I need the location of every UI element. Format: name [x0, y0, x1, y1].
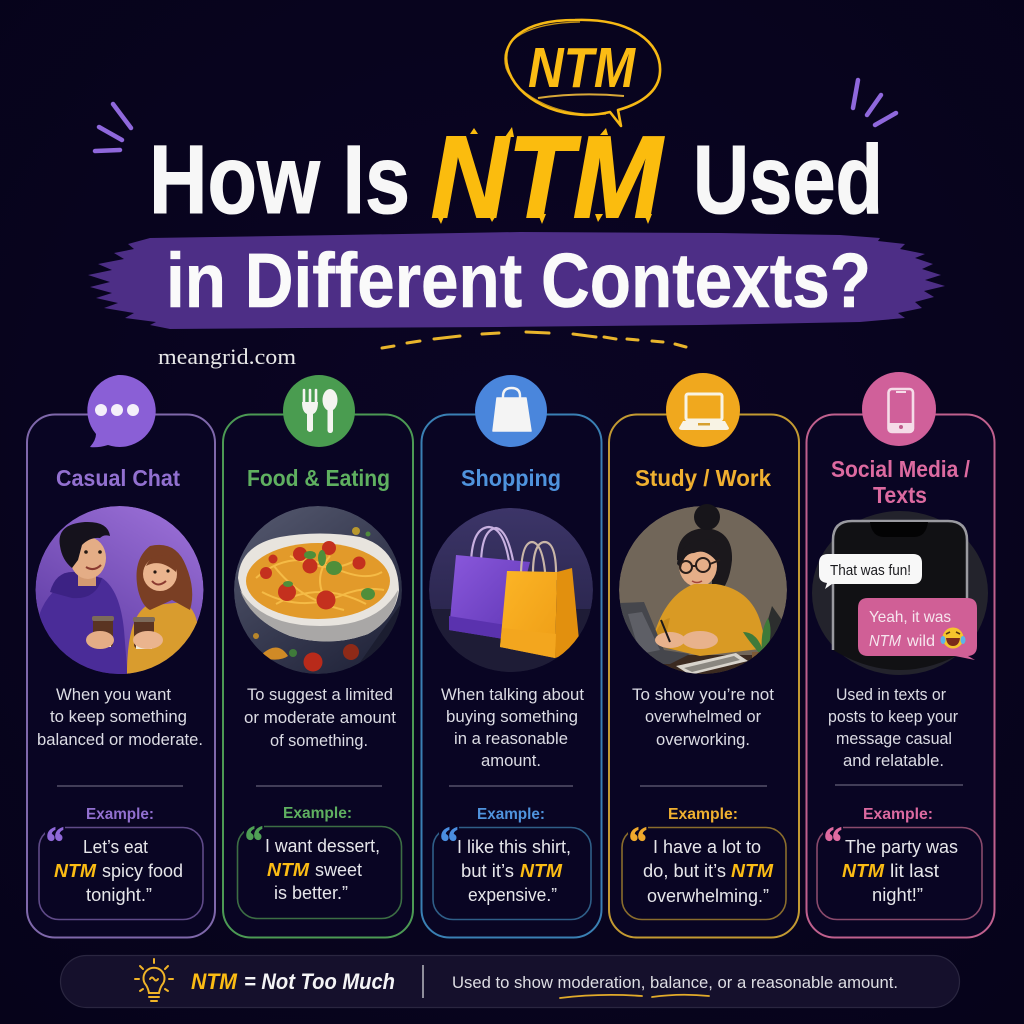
- description: To show you’re not: [632, 686, 774, 704]
- description: To suggest a limited: [247, 686, 393, 704]
- example quote box: “: [629, 820, 647, 866]
- definition: NTM: [191, 969, 238, 994]
- example label: Example:: [86, 806, 154, 823]
- icon: fork and spoon: [283, 375, 355, 447]
- heading: shopping: Shopping: [461, 465, 561, 491]
- description: buying something: [446, 708, 578, 726]
- example quote box: The party was: [845, 837, 958, 857]
- icon: light bulb: [135, 959, 173, 1001]
- illustration: student at laptop: [619, 504, 789, 680]
- example quote box: [622, 820, 786, 920]
- illustration: phone chat: [812, 511, 988, 675]
- header: NTM speech bubble: NTM: [528, 36, 636, 100]
- panel: study and work: [609, 373, 799, 938]
- chat bubble: reply: [858, 598, 977, 660]
- description: balanced or moderate.: [37, 731, 203, 749]
- example quote box: night!”: [872, 885, 923, 905]
- chat bubble: reply: Yeah, it was: [869, 609, 951, 626]
- underlines: [560, 995, 709, 998]
- footer definition bar: [60, 956, 960, 1008]
- heading: social media and texts: Social Media /: [831, 456, 971, 482]
- chat bubble: reply: wild: [906, 633, 935, 650]
- definition: [191, 969, 395, 994]
- example quote box: spicy food: [102, 861, 183, 881]
- chat bubble: reply: NTM: [869, 633, 902, 650]
- usage note: Used to show moderation, balance, or a reasonable amount.: [452, 974, 898, 992]
- description: in a reasonable: [454, 730, 568, 748]
- heading: social media and texts: [831, 456, 971, 508]
- description: of something.: [270, 732, 368, 750]
- description: [632, 686, 774, 749]
- decorative sparks left: [95, 104, 131, 151]
- heading: social media and texts: Texts: [873, 482, 927, 508]
- title line one: NTM: [431, 112, 664, 242]
- description: [244, 686, 396, 750]
- example quote box: “: [46, 820, 64, 866]
- panel: social media and texts: [806, 372, 994, 938]
- example quote box: is better.”: [274, 883, 348, 903]
- description: posts to keep your: [828, 708, 958, 726]
- example quote box: expensive.”: [468, 885, 557, 905]
- definition: = Not Too Much: [244, 969, 395, 994]
- dashed yellow arc: [382, 332, 686, 348]
- description: to keep something: [50, 708, 187, 726]
- description: or moderate amount: [244, 709, 396, 727]
- panel: shopping: [422, 375, 602, 938]
- title line one: How Is: [149, 125, 410, 234]
- chat bubble: that was fun: That was fun!: [830, 563, 911, 579]
- icon: chat bubble: [87, 375, 156, 447]
- example quote box: sweet: [315, 860, 362, 880]
- illustration: two friends with coffee: [36, 506, 204, 680]
- example quote box: [39, 820, 203, 920]
- icon: shopping bag: [475, 375, 547, 447]
- header: NTM speech bubble: [505, 20, 660, 126]
- example label: Example:: [863, 806, 933, 823]
- example quote box: NTM: [267, 860, 310, 880]
- example quote box: overwhelming.”: [647, 886, 769, 906]
- illustration: bowl of pasta: [234, 506, 404, 680]
- panel: food and eating: [223, 375, 413, 938]
- example quote box: [433, 820, 591, 920]
- title line one: [149, 112, 883, 242]
- description: overwhelmed or: [645, 708, 761, 726]
- example quote box: NTM: [842, 861, 885, 881]
- description: [441, 686, 584, 770]
- chat bubble: that was fun: [819, 554, 922, 589]
- example quote box: NTM: [731, 861, 774, 881]
- example label: Example:: [283, 805, 352, 822]
- example label: Example:: [668, 806, 738, 823]
- description: When you want: [56, 686, 171, 704]
- example quote box: [817, 820, 982, 920]
- heading: food and eating: Food & Eating: [247, 465, 390, 491]
- description: and relatable.: [843, 752, 944, 770]
- description: [37, 686, 203, 749]
- example quote box: I like this shirt,: [457, 837, 571, 857]
- description: overworking.: [656, 731, 750, 749]
- heading: casual chat: Casual Chat: [56, 465, 180, 491]
- illustration: shopping bags: [425, 508, 595, 679]
- description: When talking about: [441, 686, 584, 704]
- example quote box: “: [245, 819, 263, 865]
- example quote box: Let’s eat: [83, 837, 148, 857]
- panel: casual chat: [27, 375, 215, 938]
- icon: smartphone: [862, 372, 936, 446]
- example quote box: NTM: [520, 861, 563, 881]
- description: [828, 686, 958, 770]
- purple brush banner: [88, 232, 945, 329]
- example quote box: NTM: [54, 861, 97, 881]
- description: amount.: [481, 752, 541, 770]
- description: message casual: [836, 730, 952, 748]
- example quote box: “: [440, 820, 458, 866]
- title line one: Used: [693, 125, 883, 234]
- example quote box: lit last: [890, 861, 939, 881]
- icon: laughing emoji: [940, 628, 966, 648]
- example quote box: “: [824, 820, 842, 866]
- example label: Example:: [477, 806, 545, 823]
- example quote box: I want dessert,: [265, 836, 380, 856]
- example quote box: [238, 819, 402, 918]
- example quote box: do, but it’s: [643, 861, 726, 881]
- description: Used in texts or: [836, 686, 946, 704]
- icon: laptop: [666, 373, 740, 447]
- example quote box: I have a lot to: [653, 837, 761, 857]
- example quote box: tonight.”: [86, 885, 152, 905]
- site watermark: meangrid.com: [158, 344, 296, 369]
- heading: study and work: Study / Work: [635, 465, 771, 491]
- example quote box: but it’s: [461, 861, 514, 881]
- decorative sparks right: [853, 80, 896, 125]
- title line two: in Different Contexts?: [166, 238, 871, 324]
